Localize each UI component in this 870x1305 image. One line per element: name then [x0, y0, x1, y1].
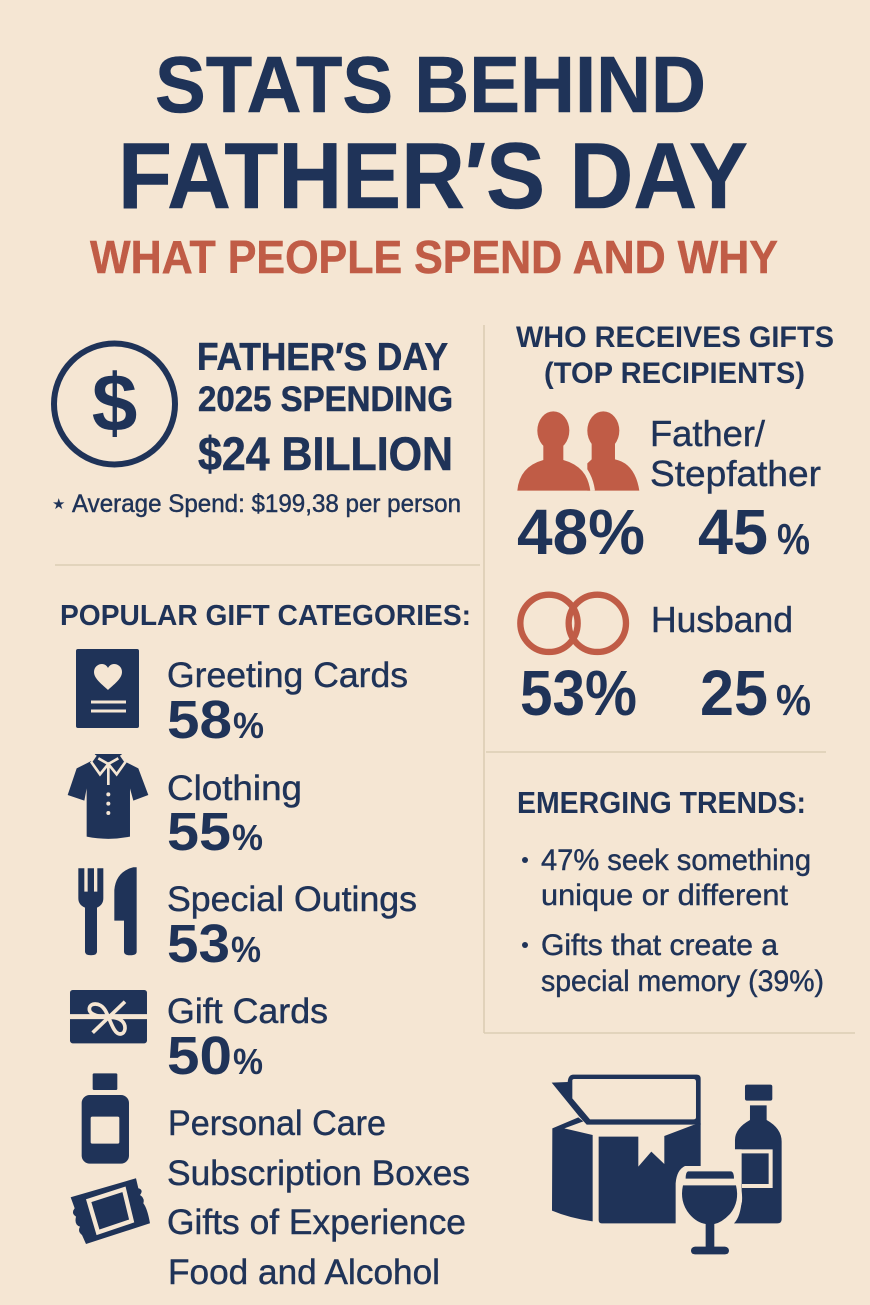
icon: fork and knife [78, 867, 137, 955]
panel: who receives gifts [516, 321, 834, 729]
greeting cards value: % [233, 705, 264, 746]
panel: popular gift categories [60, 600, 471, 1292]
husband value 25%: % [776, 676, 811, 725]
father value 45% [698, 496, 810, 568]
icon: experience ticket [71, 1178, 150, 1244]
husband value 25%: 25 [700, 657, 768, 729]
special outings value: % [231, 929, 261, 970]
clothing value [167, 802, 263, 862]
spending heading: 2025 SPENDING [198, 380, 453, 419]
subscription boxes label: Subscription Boxes [167, 1154, 470, 1193]
clothing label: Clothing [167, 769, 302, 808]
icon: dollar coin [54, 344, 175, 464]
clothing value: % [232, 817, 263, 858]
food and alcohol label: Food and Alcohol [168, 1253, 440, 1292]
icon: shirt [68, 754, 148, 839]
clothing value: 55 [167, 802, 231, 862]
total spending figure: $24 BILLION [198, 427, 453, 480]
icon: dollar coin: $ [92, 358, 137, 449]
spending heading [197, 336, 453, 419]
father stepfather label: Father/ [650, 413, 765, 454]
bullet: special memory: Gifts that create a [541, 929, 778, 962]
greeting cards value: 58 [167, 690, 232, 750]
greeting cards value [167, 690, 264, 750]
title: FATHER′S DAY [118, 123, 748, 228]
special outings value: 53 [167, 914, 230, 974]
recipients heading: (TOP RECIPIENTS) [544, 357, 805, 390]
special outings value [167, 914, 261, 974]
father value 48%: 48% [517, 496, 645, 568]
bullet: special memory [522, 929, 824, 998]
bottle [734, 1085, 782, 1223]
icon: personal care bottle [82, 1073, 129, 1164]
recipients heading: WHO RECEIVES GIFTS [516, 321, 834, 354]
gift cards label: Gift Cards [167, 992, 328, 1031]
wine glass [676, 1168, 742, 1255]
title [90, 40, 778, 283]
gift box [552, 1075, 701, 1223]
gift cards value: % [233, 1041, 263, 1082]
father stepfather label [650, 413, 821, 494]
husband label: Husband [651, 599, 793, 640]
father stepfather label: Stepfather [650, 453, 821, 494]
average spend note: Average Spend: $199,38 per person [72, 490, 461, 518]
greeting cards label: Greeting Cards [167, 656, 408, 695]
father value 45%: % [777, 515, 810, 564]
title: STATS BEHIND [155, 40, 706, 129]
trends heading: EMERGING TRENDS: [517, 785, 806, 820]
gifts of experience label: Gifts of Experience [167, 1203, 466, 1242]
bullet: unique gifts: unique or different [541, 879, 789, 912]
special outings label: Special Outings [167, 880, 417, 919]
recipients heading [516, 321, 834, 390]
gift cards value [167, 1026, 263, 1086]
father value 45%: 45 [698, 496, 768, 568]
husband value 25% [700, 657, 811, 729]
bullet: unique gifts [522, 844, 811, 912]
icon: gift card [70, 990, 147, 1043]
average spend note: ★ [52, 496, 65, 513]
personal care label: Personal Care [168, 1104, 386, 1143]
categories heading: POPULAR GIFT CATEGORIES: [60, 600, 471, 632]
gift cards value: 50 [167, 1026, 232, 1086]
icon: gift box, wine glass and bottle [552, 1075, 782, 1255]
subtitle: WHAT PEOPLE SPEND AND WHY [90, 231, 778, 283]
bullet: special memory: special memory (39%) [541, 965, 824, 998]
panel: emerging trends [517, 785, 824, 998]
bullet: unique gifts: 47% seek something [541, 844, 811, 877]
icon: two people [517, 411, 639, 491]
panel: 2025 spending [52, 336, 461, 518]
spending heading: FATHER′S DAY [197, 336, 448, 379]
husband value 53%: 53% [520, 657, 637, 729]
icon: wedding rings [520, 595, 626, 652]
icon: greeting card [76, 649, 139, 728]
